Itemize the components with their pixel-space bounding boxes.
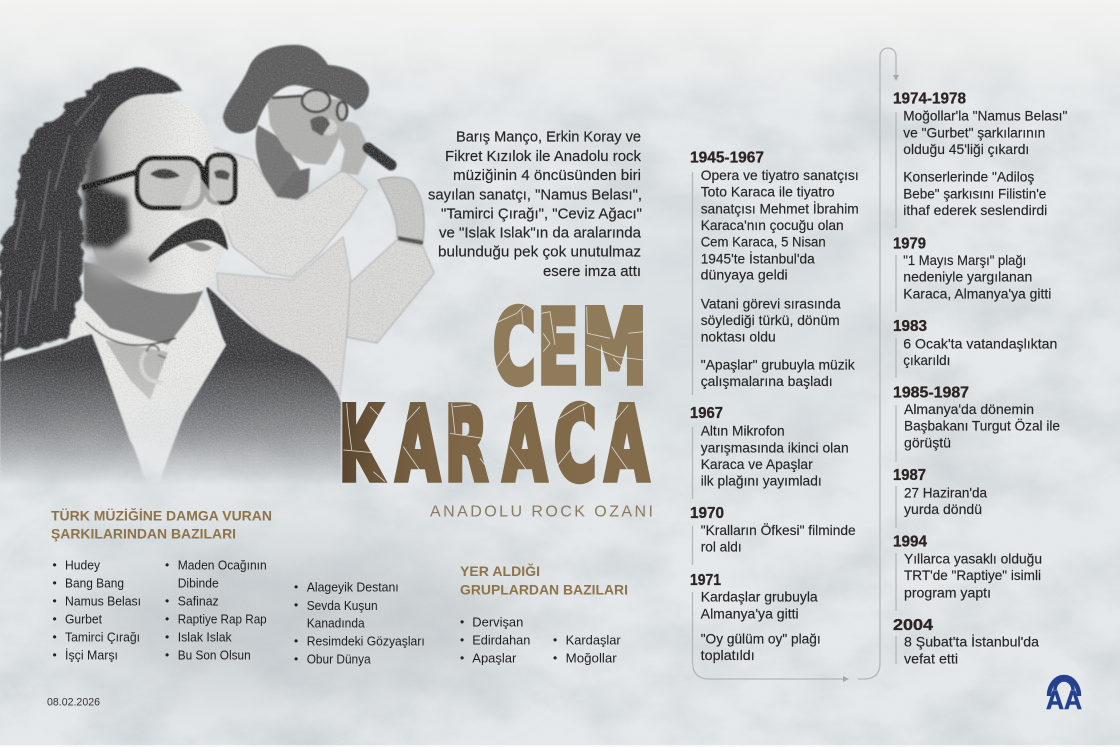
song list: column 1: • bbox=[52, 630, 57, 644]
title: CEM KARACA: A bbox=[605, 386, 649, 505]
glasses bbox=[82, 155, 235, 218]
song list: column 2: • bbox=[165, 594, 169, 608]
timeline: 1983 bbox=[893, 318, 1057, 378]
long hair bbox=[0, 69, 183, 362]
song list: column 2: • bbox=[165, 630, 169, 644]
song list: column 1: • bbox=[52, 558, 57, 572]
song list: column 2: Safinaz bbox=[178, 593, 219, 608]
group list: • bbox=[460, 615, 464, 629]
photo: Cem Karaca portrait with large glasses (foreground figure) bbox=[0, 69, 341, 500]
timeline: 1945-1967: Toto Karaca ile tiyatro bbox=[701, 184, 835, 200]
group list: Kardaşlar bbox=[566, 633, 621, 648]
group list: • bbox=[460, 633, 464, 647]
face bbox=[86, 94, 235, 294]
timeline: 2004: 2004 bbox=[893, 617, 933, 634]
song list: column 3: • bbox=[294, 580, 298, 594]
timeline: 1974-1978: ve "Gurbet" şarkılarının bbox=[903, 124, 1045, 140]
timeline: 1945-1967: Karaca'nın çocuğu olan bbox=[701, 217, 844, 233]
song list: column 1: Gurbet bbox=[65, 611, 102, 626]
song list: column 2: Maden Ocağının bbox=[178, 557, 267, 572]
song list: column 1: Tamirci Çırağı bbox=[65, 629, 140, 644]
timeline: 1945-1967: çalışmalarına başladı bbox=[701, 373, 833, 389]
title: CEM KARACA: C bbox=[493, 289, 536, 408]
heading: songs: TÜRK MÜZİĞİNE DAMGA VURAN bbox=[51, 509, 272, 524]
timeline: 1945-1967: söylediği türkü, dönüm bbox=[701, 312, 840, 328]
eyeglasses bbox=[272, 90, 347, 120]
timeline: 1967: Karaca ve Apaşlar bbox=[701, 456, 813, 472]
timeline: 1971: Almanya'ya gitti bbox=[701, 605, 799, 621]
timeline: 1945-1967: 1945-1967 bbox=[690, 150, 764, 166]
title: CEM KARACA: K bbox=[339, 386, 384, 505]
timeline: 1994: 1994 bbox=[893, 534, 927, 551]
group list: • bbox=[553, 633, 557, 647]
timeline: 1985-1987: Almanya'da dönemin bbox=[904, 401, 1034, 417]
timeline: 1945-1967: 1945'te İstanbul'da bbox=[701, 249, 815, 266]
song list: column 3: • bbox=[294, 652, 298, 666]
jacket bbox=[0, 285, 341, 500]
necklace with crescent pendant bbox=[86, 322, 176, 382]
song list: column 3: Resimdeki Gözyaşları bbox=[307, 634, 425, 649]
timeline: 2004: vefat etti bbox=[904, 650, 958, 666]
song list: column 2: Bu Son Olsun bbox=[178, 647, 251, 662]
song list: column 2: • bbox=[165, 612, 169, 626]
timeline: 1985-1987: görüştü bbox=[904, 434, 951, 450]
heading: songs: ŞARKILARINDAN BAZILARI bbox=[51, 527, 236, 542]
photo: Cem Karaca singing into a microphone (background figure) bbox=[213, 45, 434, 395]
timeline: 1967 bbox=[690, 405, 849, 499]
song list: column 2: Raptiye Rap Rap bbox=[178, 611, 267, 626]
intro paragraph: bulunduğu pek çok unutulmaz bbox=[438, 245, 641, 261]
song list: column 3: • bbox=[294, 598, 298, 612]
intro paragraph: müziğinin 4 öncüsünden biri bbox=[453, 168, 641, 184]
timeline: 1994 bbox=[893, 534, 1042, 611]
timeline: 1979: nedeniyle yargılanan bbox=[903, 269, 1032, 285]
timeline: 1994: TRT'de "Raptiye" isimli bbox=[904, 567, 1041, 583]
song list: column 3: Obur Dünya bbox=[307, 652, 372, 667]
title: CEM KARACA: M bbox=[581, 289, 647, 408]
song list: column 1: Hudey bbox=[65, 557, 101, 572]
date: 08.02.2026 bbox=[47, 697, 100, 709]
timeline: 1979 bbox=[893, 235, 1051, 312]
timeline: 1970 bbox=[690, 505, 856, 565]
group list bbox=[460, 615, 621, 666]
timeline: 1970: 1970 bbox=[690, 505, 724, 522]
timeline: 1971: "Oy gülüm oy" plağı bbox=[701, 630, 821, 646]
timeline: 1983: çıkarıldı bbox=[903, 352, 950, 368]
intro paragraph bbox=[428, 130, 642, 280]
timeline: 1987: yurda döndü bbox=[904, 501, 982, 517]
title: CEM KARACA: C bbox=[554, 386, 597, 505]
timeline: 1994: Yıllarca yasaklı olduğu bbox=[904, 550, 1042, 566]
torso of jacket bbox=[217, 237, 352, 395]
song list: column 2: • bbox=[165, 558, 169, 572]
title: CEM KARACA: A bbox=[396, 386, 440, 505]
timeline: 1945-1967: noktası oldu bbox=[701, 329, 776, 345]
timeline: 1945-1967 bbox=[690, 150, 859, 395]
subtitle: ANADOLU ROCK OZANI bbox=[430, 504, 653, 521]
timeline: 1987: 1987 bbox=[893, 467, 926, 484]
timeline: 1971: toplatıldı bbox=[701, 647, 755, 663]
mustache and lips bbox=[148, 218, 228, 263]
intro paragraph: ve "Islak Islak"ın da aralarında bbox=[439, 226, 642, 242]
group list: Moğollar bbox=[566, 651, 617, 666]
title: CEM KARACA: R bbox=[445, 386, 488, 505]
hair and tie bbox=[254, 124, 300, 195]
timeline: 1974-1978: Bebe" şarkısını Filistin'e bbox=[903, 185, 1046, 201]
timeline: 1979: "1 Mayıs Marşı" plağı bbox=[903, 252, 1026, 268]
song list: column 3: Kanadında bbox=[307, 616, 366, 631]
timeline: 1945-1967: sanatçısı Mehmet İbrahim bbox=[701, 199, 859, 216]
timeline: 1945-1967: Opera ve tiyatro sanatçısı bbox=[701, 167, 859, 183]
title: CEM KARACA: E bbox=[538, 289, 579, 408]
raised hand bbox=[378, 177, 424, 240]
timeline connector arrow bbox=[692, 48, 899, 682]
timeline: 1967: ilk plağını yayımladı bbox=[701, 473, 822, 489]
timeline: 1987: 27 Haziran'da bbox=[904, 484, 987, 500]
song list: column 1 bbox=[52, 557, 141, 662]
timeline: 1985-1987 bbox=[893, 385, 1060, 462]
group list: Apaşlar bbox=[472, 651, 517, 666]
intro paragraph: Barış Manço, Erkin Koray ve bbox=[456, 130, 641, 146]
timeline: 1970: rol aldı bbox=[701, 539, 742, 555]
heading: groups: YER ALDIĞI bbox=[460, 564, 540, 579]
song list: column 2 bbox=[165, 557, 267, 662]
song list: column 1: Bang Bang bbox=[65, 576, 124, 591]
timeline: 1945-1967: Vatani görevi sırasında bbox=[701, 295, 841, 311]
song list: column 1: İşçi Marşı bbox=[65, 647, 118, 662]
song list: column 3 bbox=[294, 580, 425, 667]
group list: • bbox=[553, 651, 557, 665]
timeline: 1945-1967: "Apaşlar" grubuyla müzik bbox=[701, 356, 856, 372]
timeline: 1971: Kardaşlar grubuyla bbox=[701, 589, 818, 605]
heading: groups: GRUPLARDAN BAZILARI bbox=[460, 582, 628, 597]
timeline: 1979: 1979 bbox=[893, 235, 926, 252]
song list: column 1: • bbox=[52, 612, 57, 626]
timeline: 1967: yarışmasında ikinci olan bbox=[701, 439, 849, 455]
shirt and collar bbox=[57, 297, 227, 450]
timeline: 1983: 1983 bbox=[893, 318, 927, 335]
song list: column 1: Namus Belası bbox=[65, 593, 141, 608]
song list: column 1: • bbox=[52, 576, 57, 590]
timeline: 1974-1978: ithaf ederek seslendirdi bbox=[903, 202, 1047, 218]
timeline: 1974-1978: olduğu 45'liği çıkardı bbox=[903, 141, 1029, 157]
song list: column 2: Islak Islak bbox=[178, 629, 232, 644]
timeline: 1974-1978: 1974-1978 bbox=[893, 90, 966, 107]
timeline: 1979: Karaca, Almanya'ya gitti bbox=[903, 285, 1051, 301]
song list: column 3: Sevda Kuşun bbox=[307, 598, 378, 613]
sideburn bbox=[84, 182, 130, 248]
timeline: 1985-1987: Başbakanı Turgut Özal ile bbox=[904, 417, 1060, 434]
timeline: 1945-1967: dünyaya geldi bbox=[701, 266, 788, 282]
intro paragraph: Fikret Kızılok ile Anadolu rock bbox=[445, 149, 642, 165]
face bbox=[267, 95, 347, 165]
timeline: 1967: 1967 bbox=[690, 405, 723, 422]
timeline: 1974-1978: Konserlerinde "Adiloş bbox=[903, 169, 1034, 185]
timeline: 1970: "Kralların Öfkesi" filminde bbox=[701, 521, 856, 538]
intro paragraph: sayılan sanatçı, "Namus Belası", bbox=[428, 187, 642, 203]
group list: • bbox=[460, 651, 464, 665]
timeline: 1983: 6 Ocak'ta vatandaşlıktan bbox=[903, 335, 1057, 351]
hand with microphone bbox=[338, 121, 368, 176]
logo: Anadolu Agency AA: AA bbox=[1046, 685, 1082, 715]
intro paragraph: esere imza attı bbox=[543, 264, 641, 280]
timeline: 1974-1978 bbox=[893, 90, 1067, 228]
title: CEM KARACA bbox=[339, 289, 649, 505]
hat bbox=[223, 45, 369, 133]
heading: groups bbox=[460, 564, 628, 597]
timeline: 1985-1987: 1985-1987 bbox=[893, 385, 969, 402]
timeline: 1971: 1971 bbox=[690, 572, 721, 589]
timeline: 1994: program yaptı bbox=[904, 584, 991, 600]
timeline: 2004: 8 Şubat'ta İstanbul'da bbox=[904, 633, 1039, 650]
group list: Edirdahan bbox=[472, 633, 530, 648]
timeline: 2004 bbox=[893, 617, 1039, 666]
song list: column 3: • bbox=[294, 634, 298, 648]
heading: songs bbox=[51, 509, 272, 542]
song list: column 3: Alageyik Destanı bbox=[307, 580, 399, 595]
intro paragraph: "Tamirci Çırağı", "Ceviz Ağacı" bbox=[441, 206, 642, 222]
song list: column 1: • bbox=[52, 648, 57, 662]
timeline: 1971 bbox=[690, 572, 821, 663]
timeline: 1987 bbox=[893, 467, 987, 528]
left arm bbox=[347, 240, 434, 343]
timeline: 1974-1978: Moğollar'la "Namus Belası" bbox=[903, 108, 1067, 124]
sleeve bbox=[213, 147, 367, 277]
neck bbox=[84, 262, 205, 345]
group list: Dervişan bbox=[472, 615, 523, 630]
song list: column 2: Dibinde bbox=[178, 576, 219, 591]
song list: column 2: • bbox=[165, 648, 169, 662]
timeline: 1967: Altın Mikrofon bbox=[701, 423, 785, 439]
song list: column 1: • bbox=[52, 594, 57, 608]
timeline: 1945-1967: Cem Karaca, 5 Nisan bbox=[701, 234, 826, 250]
title: CEM KARACA: A bbox=[503, 386, 547, 505]
